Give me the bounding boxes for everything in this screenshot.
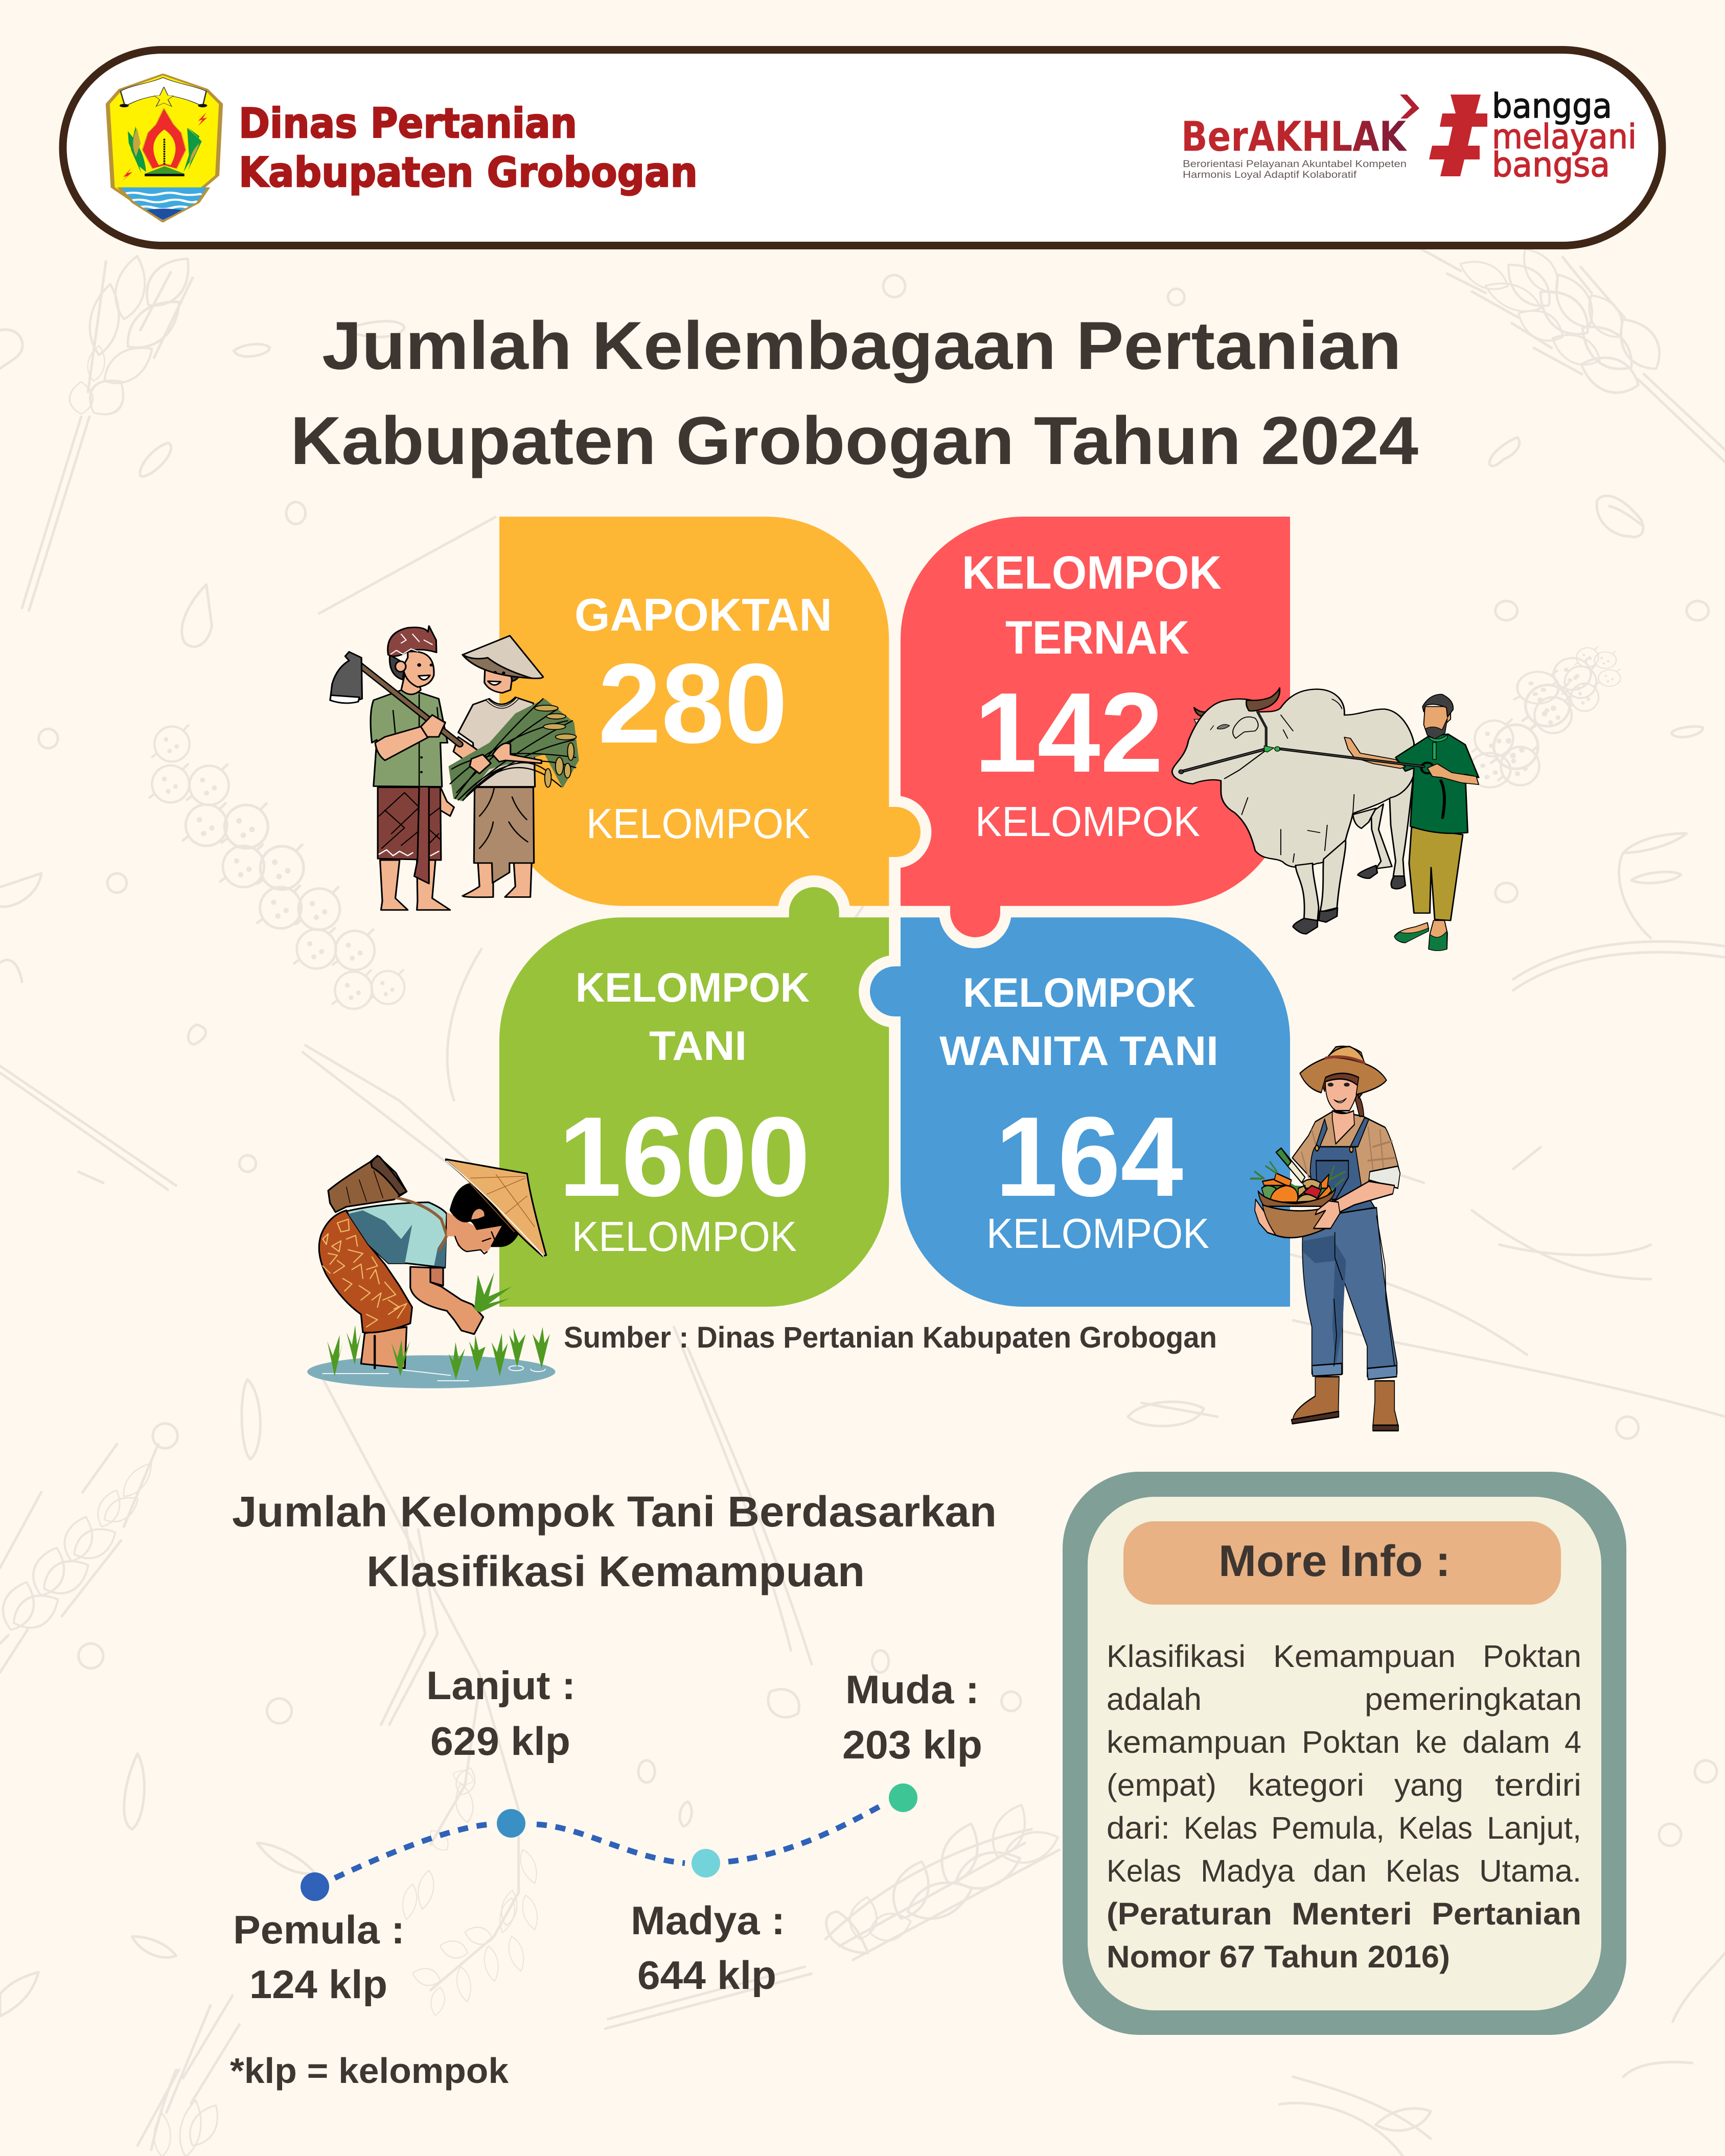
panel: gapoktan: GAPOKTAN (574, 590, 832, 641)
more info text: Lanjut, (1487, 1811, 1581, 1845)
panel: kelompok wanita tani: KELOMPOK (986, 1210, 1209, 1257)
more info text: dan (1313, 1853, 1367, 1888)
more info text: dalam (1462, 1725, 1550, 1759)
more info text: kemampuan (1107, 1725, 1286, 1759)
logo: BerAKHLAK: Berorientasi Pelayanan Akuntabel Kompeten (1183, 159, 1407, 170)
label: madya: Madya : (631, 1898, 785, 1943)
more info text: ke (1415, 1725, 1447, 1759)
illustration: woman farmer with basket (1251, 1046, 1400, 1431)
logo: bangga melayani bangsa: melayani (1492, 117, 1637, 156)
more info text: Poktan (1302, 1725, 1400, 1759)
panel: kelompok wanita tani: KELOMPOK (963, 970, 1195, 1016)
panel: kelompok tani: TANI (649, 1023, 747, 1069)
office name (239, 100, 698, 196)
panel: kelompok tani: KELOMPOK (576, 965, 810, 1011)
more info text: kategori (1248, 1768, 1364, 1802)
point: madya (692, 1849, 720, 1877)
more info text: (empat) (1107, 1768, 1216, 1802)
more info text: Nomor 67 Tahun 2016) (1107, 1939, 1450, 1974)
label: pemula: Pemula : (233, 1907, 405, 1952)
logo: BerAKHLAK: BerAKHLAK (1181, 113, 1408, 160)
title (290, 308, 1418, 479)
panel: kelompok ternak (901, 517, 1290, 937)
footnote: *klp = kelompok (230, 2051, 509, 2091)
label: lanjut: Lanjut : (426, 1663, 576, 1708)
more info text: Klasifikasi (1107, 1639, 1246, 1674)
office name: Kabupaten Grobogan (239, 149, 698, 196)
title: Jumlah Kelembagaan Pertanian (322, 308, 1401, 384)
chart: dotted line of classification (301, 1783, 917, 1901)
panel: gapoktan: KELOMPOK (586, 800, 810, 847)
panel: kelompok wanita tani: 164 (995, 1094, 1183, 1220)
icon: Grobogan regency crest (108, 75, 221, 221)
label: pemula: 124 klp (249, 1962, 387, 2007)
more info text: Madya (1201, 1853, 1295, 1888)
panel: kelompok ternak: 142 (974, 669, 1163, 796)
more info text: terdiri (1495, 1768, 1581, 1802)
more info text: Utama. (1479, 1853, 1581, 1888)
point: pemula (301, 1872, 329, 1901)
more info text: Kemampuan (1273, 1639, 1456, 1674)
label: muda: 203 klp (842, 1722, 982, 1767)
panel: kelompok tani (499, 887, 889, 1307)
more info text: Kelas (1386, 1853, 1460, 1888)
more info text: Kelas (1107, 1853, 1181, 1888)
panel: gapoktan: 280 (598, 640, 788, 767)
title: Kabupaten Grobogan Tahun 2024 (290, 403, 1418, 479)
panel: kelompok wanita tani: WANITA TANI (939, 1028, 1218, 1074)
more info text: dari: (1107, 1811, 1170, 1845)
logo: BerAKHLAK: Harmonis Loyal Adaptif Kolaboratif (1183, 170, 1357, 180)
panel: kelompok tani: 1600 (559, 1094, 810, 1220)
panel: more info (1063, 1472, 1626, 2035)
more info text: 4 (1565, 1725, 1581, 1759)
header banner (63, 50, 1662, 245)
section heading: kelompok tani classification (232, 1488, 997, 1595)
more info text: (Peraturan (1107, 1896, 1272, 1931)
more info text: Kelas (1398, 1811, 1473, 1845)
panel: kelompok ternak: KELOMPOK (975, 798, 1200, 845)
more info text: Poktan (1483, 1639, 1581, 1674)
label: lanjut (426, 1663, 576, 1764)
panel: gapoktan (499, 517, 921, 906)
more info heading (1123, 1521, 1561, 1605)
more info text: Kelas (1184, 1811, 1257, 1845)
panel: kelompok wanita tani (870, 917, 1290, 1307)
more info text: adalah (1107, 1682, 1202, 1717)
more info text: yang (1394, 1768, 1463, 1802)
point: muda (889, 1783, 917, 1812)
logo: bangga melayani bangsa: bangsa (1492, 145, 1610, 184)
illustration: two farmers (330, 626, 579, 910)
more info text: pemeringkatan (1365, 1682, 1582, 1717)
point: lanjut (497, 1809, 525, 1838)
illustration: rice planter (307, 1155, 556, 1388)
logo: bangga melayani bangsa (1429, 86, 1637, 184)
panel: kelompok ternak: KELOMPOK (962, 547, 1222, 599)
more info heading: More Info : (1218, 1537, 1451, 1586)
illustration: cow and handler (1172, 688, 1479, 951)
label: madya (631, 1898, 785, 1998)
more info text: Pertanian (1432, 1896, 1581, 1931)
office name: Dinas Pertanian (239, 100, 577, 147)
more info text (1107, 1639, 1582, 1974)
panel: kelompok tani: KELOMPOK (572, 1213, 797, 1260)
more info text: Menteri (1292, 1896, 1412, 1931)
label: lanjut: 629 klp (430, 1719, 570, 1764)
label: muda (842, 1667, 982, 1767)
section heading: kelompok tani classification: Jumlah Kelompok Tani Berdasarkan (232, 1488, 997, 1536)
logo: BerAKHLAK (1181, 95, 1419, 180)
logo: bangga melayani bangsa: bangga (1492, 86, 1612, 126)
more info text: Pemula, (1271, 1811, 1385, 1845)
source note: Sumber : Dinas Pertanian Kabupaten Grobogan (564, 1321, 1217, 1354)
panel: kelompok ternak: TERNAK (1005, 612, 1189, 664)
label: pemula (233, 1907, 405, 2007)
section heading: kelompok tani classification: Klasifikasi Kemampuan (366, 1547, 865, 1595)
label: madya: 644 klp (637, 1953, 776, 1998)
label: muda: Muda : (845, 1667, 979, 1712)
